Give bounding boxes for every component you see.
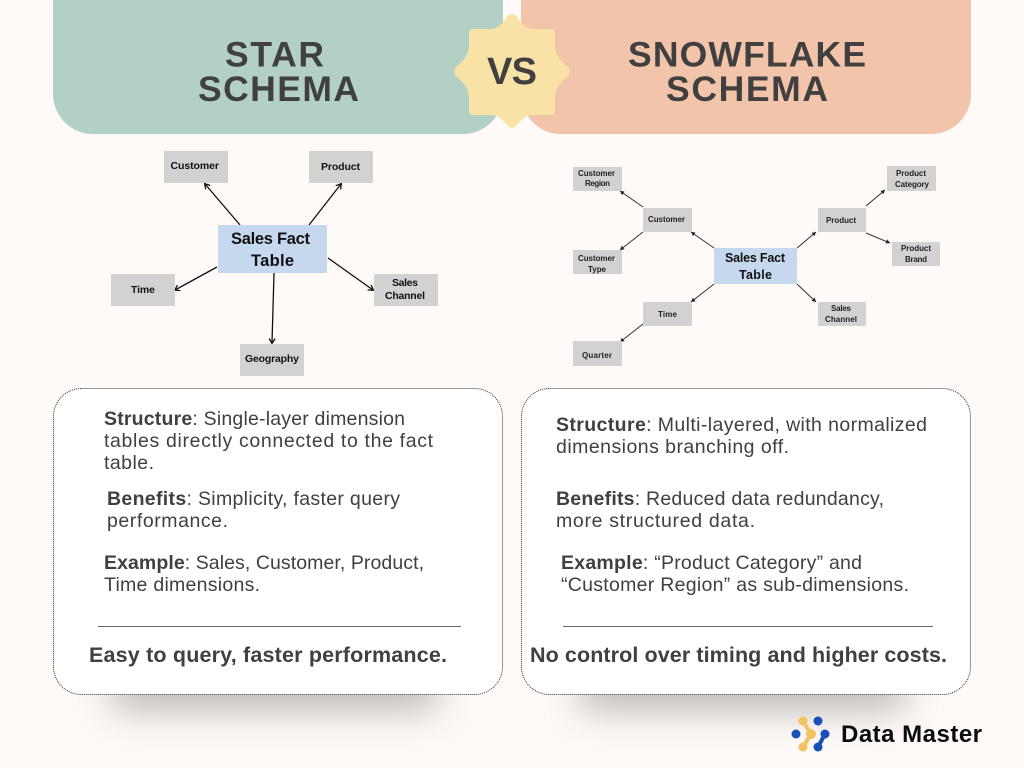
logo: data master: Data Master xyxy=(841,721,982,748)
heading: snowflake schema: SCHEMA xyxy=(666,69,828,109)
node: time: Time xyxy=(658,310,678,319)
text: example: Example: “Product Category” and xyxy=(561,552,862,574)
node: sales fact table: Table xyxy=(739,268,772,282)
node: product category: Category xyxy=(895,180,930,189)
node: time xyxy=(111,274,175,306)
node: product xyxy=(309,151,373,183)
heading: star schema xyxy=(198,34,359,109)
text: benefits: Benefits: Reduced data redundancy, xyxy=(556,488,884,510)
node: customer xyxy=(164,151,228,183)
text: example: Time dimensions. xyxy=(104,574,260,596)
text: benefits: more structured data. xyxy=(556,510,755,532)
node: customer type: Type xyxy=(588,265,607,274)
icon: network dots xyxy=(792,716,830,752)
text: example: Example: Sales, Customer, Product, xyxy=(104,552,424,574)
text: structure: table. xyxy=(104,452,154,474)
panel: star schema details xyxy=(54,388,502,694)
text: benefits xyxy=(107,488,400,532)
node: product brand: Product xyxy=(901,244,931,253)
node: product category xyxy=(887,166,936,191)
node: sales fact table: Sales Fact xyxy=(231,230,310,248)
node: customer region: Customer xyxy=(578,169,615,178)
text: structure: Structure: Single-layer dimension xyxy=(104,408,405,430)
text: structure xyxy=(104,408,434,474)
node: quarter: Quarter xyxy=(582,351,612,360)
node: product xyxy=(818,208,866,232)
node: geography: Geography xyxy=(245,353,299,365)
node: time xyxy=(643,302,692,326)
node: sales channel xyxy=(818,302,866,326)
heading: snowflake schema: SNOWFLAKE xyxy=(628,34,866,74)
node: product: Product xyxy=(321,161,360,173)
node: sales fact table xyxy=(218,225,327,273)
node: product category: Product xyxy=(896,169,926,178)
node: sales channel xyxy=(374,274,438,306)
diagram: star schema xyxy=(111,151,438,376)
diagram: snowflake schema xyxy=(573,166,940,366)
text: structure xyxy=(556,414,927,458)
text: example xyxy=(561,552,909,596)
node: customer type: Customer xyxy=(578,254,615,263)
text: example: “Customer Region” as sub-dimensions. xyxy=(561,574,909,596)
text: structure: Structure: Multi-layered, with normalized xyxy=(556,414,927,436)
node: customer region: Region xyxy=(585,179,610,188)
node: customer xyxy=(643,208,692,232)
panel: snowflake schema details xyxy=(522,388,970,694)
heading: star schema: SCHEMA xyxy=(198,69,359,109)
node: geography xyxy=(240,344,304,376)
text: structure: tables directly connected to the fact xyxy=(104,430,434,452)
heading: snowflake schema xyxy=(628,34,866,109)
node: sales channel: Sales xyxy=(831,304,852,313)
node: product brand xyxy=(892,242,940,266)
arrows: snowflake schema xyxy=(620,190,890,342)
node: sales channel: Channel xyxy=(385,290,425,302)
arrows: star schema xyxy=(175,184,373,343)
node: customer region xyxy=(573,167,622,191)
badge: VS xyxy=(454,14,570,128)
conclusion: star schema: Easy to query, faster performance. xyxy=(89,643,447,667)
node: sales channel: Sales xyxy=(392,277,418,289)
badge: VS: VS xyxy=(487,51,537,93)
text: benefits: Benefits: Simplicity, faster query xyxy=(107,488,400,510)
node: sales fact table xyxy=(714,248,797,284)
node: sales channel: Channel xyxy=(825,315,857,324)
node: quarter xyxy=(573,341,622,366)
heading: star schema: STAR xyxy=(225,34,324,74)
node: customer type xyxy=(573,250,622,274)
node: product: Product xyxy=(826,216,856,225)
node: customer: Customer xyxy=(170,160,219,172)
node: product brand: Brand xyxy=(905,255,927,264)
node: customer: Customer xyxy=(648,215,685,224)
logo: data master xyxy=(792,716,982,752)
text: benefits xyxy=(556,488,884,532)
conclusion: snowflake schema: No control over timing and higher costs. xyxy=(530,643,947,667)
node: sales fact table: Sales Fact xyxy=(725,251,786,265)
text: example xyxy=(104,552,424,596)
card shadows xyxy=(112,660,905,710)
panel: star schema header xyxy=(53,0,503,134)
node: time: Time xyxy=(131,284,155,296)
node: sales fact table: Table xyxy=(251,252,294,270)
panel: snowflake schema header xyxy=(521,0,971,134)
text: structure: dimensions branching off. xyxy=(556,436,789,458)
text: benefits: performance. xyxy=(107,510,228,532)
